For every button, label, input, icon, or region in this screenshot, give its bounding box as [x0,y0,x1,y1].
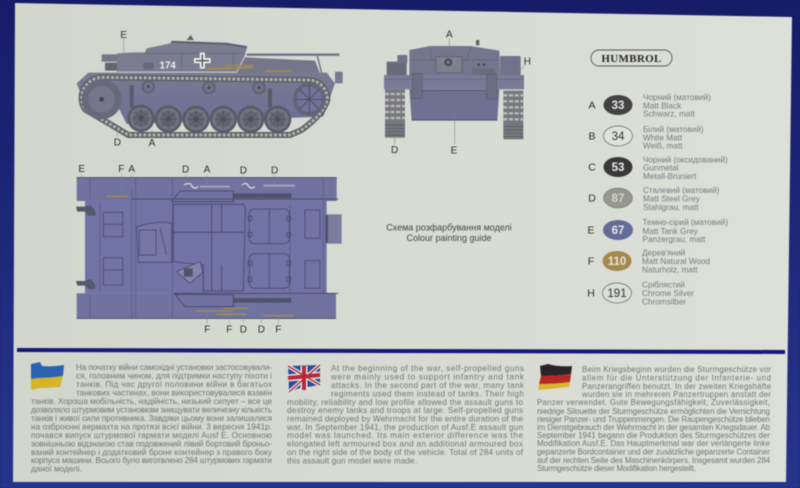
tactical number: 174 [160,60,176,71]
Ukrainian flag [31,362,64,390]
German text: riesiger Panzer- und Truppenmengen. Die Raupengeschütze blieben [537,415,770,424]
paint A: Matt Black [643,102,682,110]
paint F: Naturholz, matt [642,266,698,274]
paint A: Schwarz, matt [643,110,696,118]
German text: Beim Kriegsbeginn wurden die Sturmgeschütze vor [582,365,771,374]
German text: allem für die Unterstützung der Infanterie- und [582,374,771,382]
German text: Modifikation Ausf.E. Das Hauptmerkmal war der verlängerte linke [537,439,771,448]
leader lines [117,39,152,137]
fender rails [77,178,338,318]
paint E: E [587,224,595,236]
tracks [385,89,523,139]
paint F: F [588,256,594,268]
top view labels: D [258,325,265,336]
top view of tank [76,164,342,336]
Ukrainian text: танків. Хороша мобільність, надійність, низький силует – все це [31,397,272,406]
German text: niedrige Silouette der Sturmgeschütze ermöglichten die Vernichtung [537,407,770,416]
Ukrainian text: корпуса машини. Всього було виготвлено 284 штурмових гармати [31,456,272,465]
German flag [538,364,572,390]
paint B: White Matt [643,134,683,142]
gun barrel [102,54,128,62]
English text: were mainly used to support infantry and tank [330,372,525,382]
German text: Sturmgeschütze dieser Modifikation hergestellt. [537,464,696,473]
German text: auf der rechten Seite des Maschinenkörpers. Insgesamt wurden 284 [537,456,771,465]
top view labels: D [240,165,247,176]
Ukrainian text: ваний контейнер і додатковий броне контейнер з правого боку [31,448,273,457]
paint E: Panzergrau, matt [642,235,706,244]
top view labels: D [271,165,278,176]
paint B [588,125,704,150]
top view labels: D [182,165,189,176]
casemate [172,191,245,307]
humbrol logo: HUMBROL [601,53,662,65]
rear hatches [103,210,320,288]
Ukrainian text: танкових частинах, вони використовувалися взамін [76,388,272,398]
English text: destroy enemy tanks and troops at large. Self-propelled guns [287,406,523,415]
paint H: H [587,288,595,300]
paint A [588,93,711,118]
paint H: Chromsilber [642,298,686,306]
English text: war. In September 1941, the production of Ausf.E assault gun [286,423,523,432]
paint B: Weiß, matt [643,142,683,150]
caption: colour painting guide: Схема розфарбування моделі [386,222,512,232]
lower hull [77,73,335,124]
English text: this assault gun model were made. [287,456,417,466]
English text: remained deployed by Wehrmacht for the entire duration of the [287,414,523,424]
top view labels: F [275,325,281,336]
tow hooks [412,73,497,99]
front labels [391,30,531,157]
English text: on the right side of the body of the vehicle. Total of 284 units of [287,448,524,457]
paint F: Дерев'яний [642,248,685,258]
English text: attacks. In the second part of the war, many tank [331,381,525,390]
English text: regiments used them instead of tanks. Their high [331,390,524,398]
Ukrainian text: почався випуск штурмової гармати моделі Ausf E. Основною [31,431,272,440]
idler wheel [293,83,326,116]
English text: At the beginning of the war, self-propelled guns [331,364,524,373]
paint F: Matt Natural Wood [642,257,711,266]
fenders [77,178,337,318]
paint D: Сталевий (матовий) [643,186,720,195]
paint E [587,218,728,244]
English text: model was launched. Its main exterior difference was the [287,431,523,440]
fender band [384,75,524,89]
rear grille and tools [184,183,327,300]
front view of tank [384,30,531,157]
tools on deck [207,66,292,71]
Ukrainian text: На початку війни самохідні установки застосовували- [76,363,272,372]
rear rack [247,51,339,58]
front labels: A [446,30,453,41]
paint H: Сріблястий [642,280,685,290]
paint legend [587,93,728,306]
side view of tank [77,30,343,149]
top view labels: E [78,164,85,175]
side labels [114,30,156,149]
paint C: C [588,162,596,174]
front labels: E [451,146,458,157]
paint C: Чорний (оксидований) [643,156,728,164]
paint B: B [588,130,596,142]
side labels: D [114,137,121,148]
paint D: 87 [612,193,624,205]
Ukrainian text: дозволяло штурмовим установкам знищувати величезну кількість [31,406,272,414]
paint A: Чорний (матовий) [643,93,711,102]
English text [286,364,525,466]
caption: colour painting guide: Colour painting guide [406,233,492,243]
paint B: Білий (матовий) [643,125,704,134]
Ukrainian text: танків і живої сили противника. Завдяки цьому вони залишалися [31,414,272,423]
upper hull [409,46,500,79]
German text: gepanzerte Bordcontainer und der zusätzliche gepanzerte Container [537,448,770,456]
track [82,77,327,135]
wooden tools [107,196,293,316]
top view labels: F [226,325,232,336]
paint C: Metall-Bruniert [643,172,697,181]
English text: mobility, reliability and low profile allowed the assault guns to [287,398,523,407]
German text: September 1941 begann die Produktion des Sturmgeschützes der [537,431,770,440]
top view labels: D [240,325,247,336]
front labels: D [391,145,398,156]
Ukrainian text: зовнішньою відзнакою став подовжений лівий бортовий броньо- [31,440,272,448]
sprocket wheel [82,79,122,119]
humbrol logo [591,50,672,66]
side labels: E [120,30,127,41]
paint F: 110 [608,256,626,268]
paint D: Stahlgrau, matt [643,203,699,212]
balkenkreuz [194,53,211,69]
commander position [137,222,172,262]
front labels: H [524,56,531,67]
side labels: A [149,138,156,149]
German text [537,365,772,473]
German text: Panzer verwendet. Gute Bewegungsfähigkeit, Zuverlässigkeit, [537,398,770,407]
British flag [288,365,320,392]
paint A: A [588,100,596,112]
top leader lines [82,174,278,323]
paint D [588,186,720,212]
top view labels: A [204,165,211,176]
English text: elongated left armoured box and an additional armoured box [287,440,523,448]
paint H: Chrome Silver [642,289,694,298]
Ukrainian text [31,363,273,474]
paint C [588,156,728,181]
German text: im Dienstgebrauch der Wehrmacht in der gesamten Kriegsdauer. Ab [537,423,771,432]
paint D: D [588,192,596,204]
gun mantlet [436,57,462,73]
top view labels: F [118,164,124,175]
paint F [588,248,711,274]
paint E: 67 [612,225,624,237]
leader lines [395,39,525,144]
top view labels: F [204,325,210,336]
paint H: 191 [607,288,627,300]
paint D: Matt Steel Grey [643,194,701,204]
paint C: 53 [612,162,624,174]
paint B: 34 [612,131,625,143]
towing hooks [76,205,95,289]
German text: wurden sie in mehreren Panzertruppen anstatt der [581,390,771,399]
blue divider band [17,348,785,354]
superstructure [117,41,247,72]
caption: colour painting guide [386,222,512,243]
paint E: Matt Tank Grey [642,227,699,236]
Ukrainian text: танків. Під час другої половини війни в багатьох [76,380,272,389]
paint H [587,280,694,306]
top view labels [78,164,281,336]
top view labels: A [128,164,135,175]
side boxes [387,62,407,78]
German text: Panzerangriffen benutzt. In der zweiten Kriegshäfte [582,382,772,391]
suspension [132,85,270,107]
Ukrainian text: на озброєнні вермахта на протязі всієї війни. 3 вересня 1941р. [31,422,272,432]
return rollers [141,80,266,95]
gunner periscope [177,262,203,283]
lower hull [409,89,499,121]
paint C: Gunmetal [643,164,679,172]
paint E: Темно-сірий (матовий) [642,218,728,227]
Ukrainian text: ся, головним чином, для підтримки наступу піхоти і [76,372,272,380]
paint A: 33 [612,100,624,112]
road wheels [127,105,291,133]
cupola [476,40,479,45]
hull top [85,201,327,293]
engine hatches [248,209,291,288]
Ukrainian text: даної моделі. [31,464,82,474]
structure lines [90,178,323,318]
driver visor [472,63,495,76]
